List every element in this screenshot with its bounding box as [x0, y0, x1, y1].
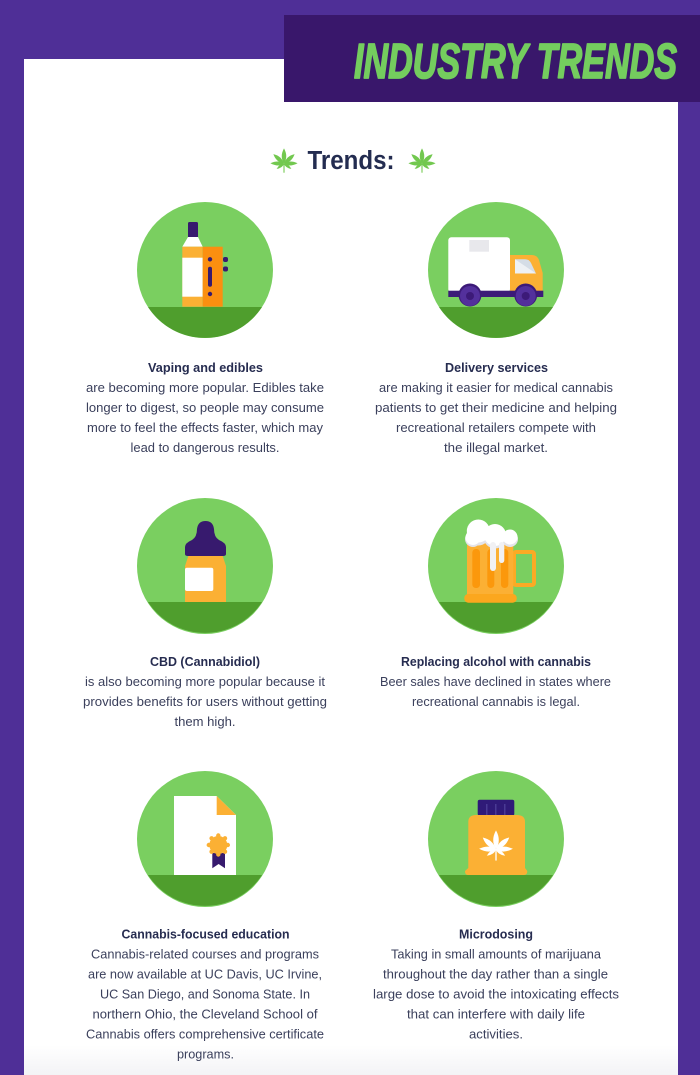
body text: recreational retailers compete with [396, 421, 596, 435]
icon: vape bottle and mod [137, 202, 273, 338]
heading: Cannabis-focused education [122, 928, 290, 942]
panel: vaping and edibles [86, 202, 324, 455]
body text: Cannabis-related courses and programs [91, 948, 319, 962]
body text [86, 948, 324, 1062]
icon: left cannabis leaf [270, 148, 298, 173]
body text: longer to digest, so people may consume [86, 401, 324, 415]
body text: recreational cannabis is legal. [412, 695, 580, 709]
panel: education [86, 771, 324, 1062]
body text: is also becoming more popular because it [85, 675, 326, 689]
body text: lead to dangerous results. [130, 441, 280, 455]
body text [373, 948, 619, 1042]
body text: large dose to avoid the intoxicating effects [373, 988, 619, 1002]
panel: delivery services [375, 202, 617, 455]
body text: them high. [174, 715, 236, 729]
heading: CBD (Cannabidiol) [150, 655, 260, 669]
icon: beer mug [428, 498, 564, 634]
body text: programs. [177, 1048, 234, 1062]
title banner [284, 15, 700, 102]
body text: are now available at UC Davis, UC Irvine, [88, 968, 322, 982]
body text [380, 675, 611, 709]
body text: that can interfere with daily life [407, 1008, 585, 1022]
body text: are making it easier for medical cannabis [379, 381, 613, 395]
body text: northern Ohio, the Cleveland School of [92, 1008, 318, 1022]
panel: replacing alcohol [380, 498, 611, 709]
body text: the illegal market. [444, 441, 548, 455]
panel bottom fade [24, 1045, 678, 1075]
heading: Vaping and edibles [148, 361, 263, 375]
heading: Replacing alcohol with cannabis [401, 655, 591, 669]
body text [86, 381, 324, 455]
section heading: Trends [270, 147, 436, 175]
heading: Microdosing [459, 928, 533, 942]
body text: Taking in small amounts of marijuana [391, 948, 601, 962]
heading text: Trends: [308, 147, 394, 175]
icon: delivery truck [428, 202, 564, 338]
body text: throughout the day rather than a single [383, 968, 608, 982]
body text [375, 381, 617, 455]
panel: microdosing [373, 771, 619, 1042]
body text: Cannabis offers comprehensive certificate [86, 1028, 324, 1042]
body text: provides benefits for users without getting [83, 695, 327, 709]
icon: certificate document [137, 771, 273, 907]
heading: Delivery services [445, 361, 548, 375]
body text [83, 675, 327, 729]
icon: right cannabis leaf [408, 148, 436, 173]
body text: Beer sales have declined in states where [380, 675, 611, 689]
body text: activities. [469, 1028, 523, 1042]
panel: CBD [83, 498, 327, 729]
body text: patients to get their medicine and helping [375, 401, 617, 415]
body text: are becoming more popular. Edibles take [86, 381, 324, 395]
icon: dropper bottle [137, 498, 273, 634]
icon: cannabis jar [428, 771, 564, 907]
body text: UC San Diego, and Sonoma State. In [100, 988, 310, 1002]
body text: more to feel the effects faster, which may [87, 421, 324, 435]
